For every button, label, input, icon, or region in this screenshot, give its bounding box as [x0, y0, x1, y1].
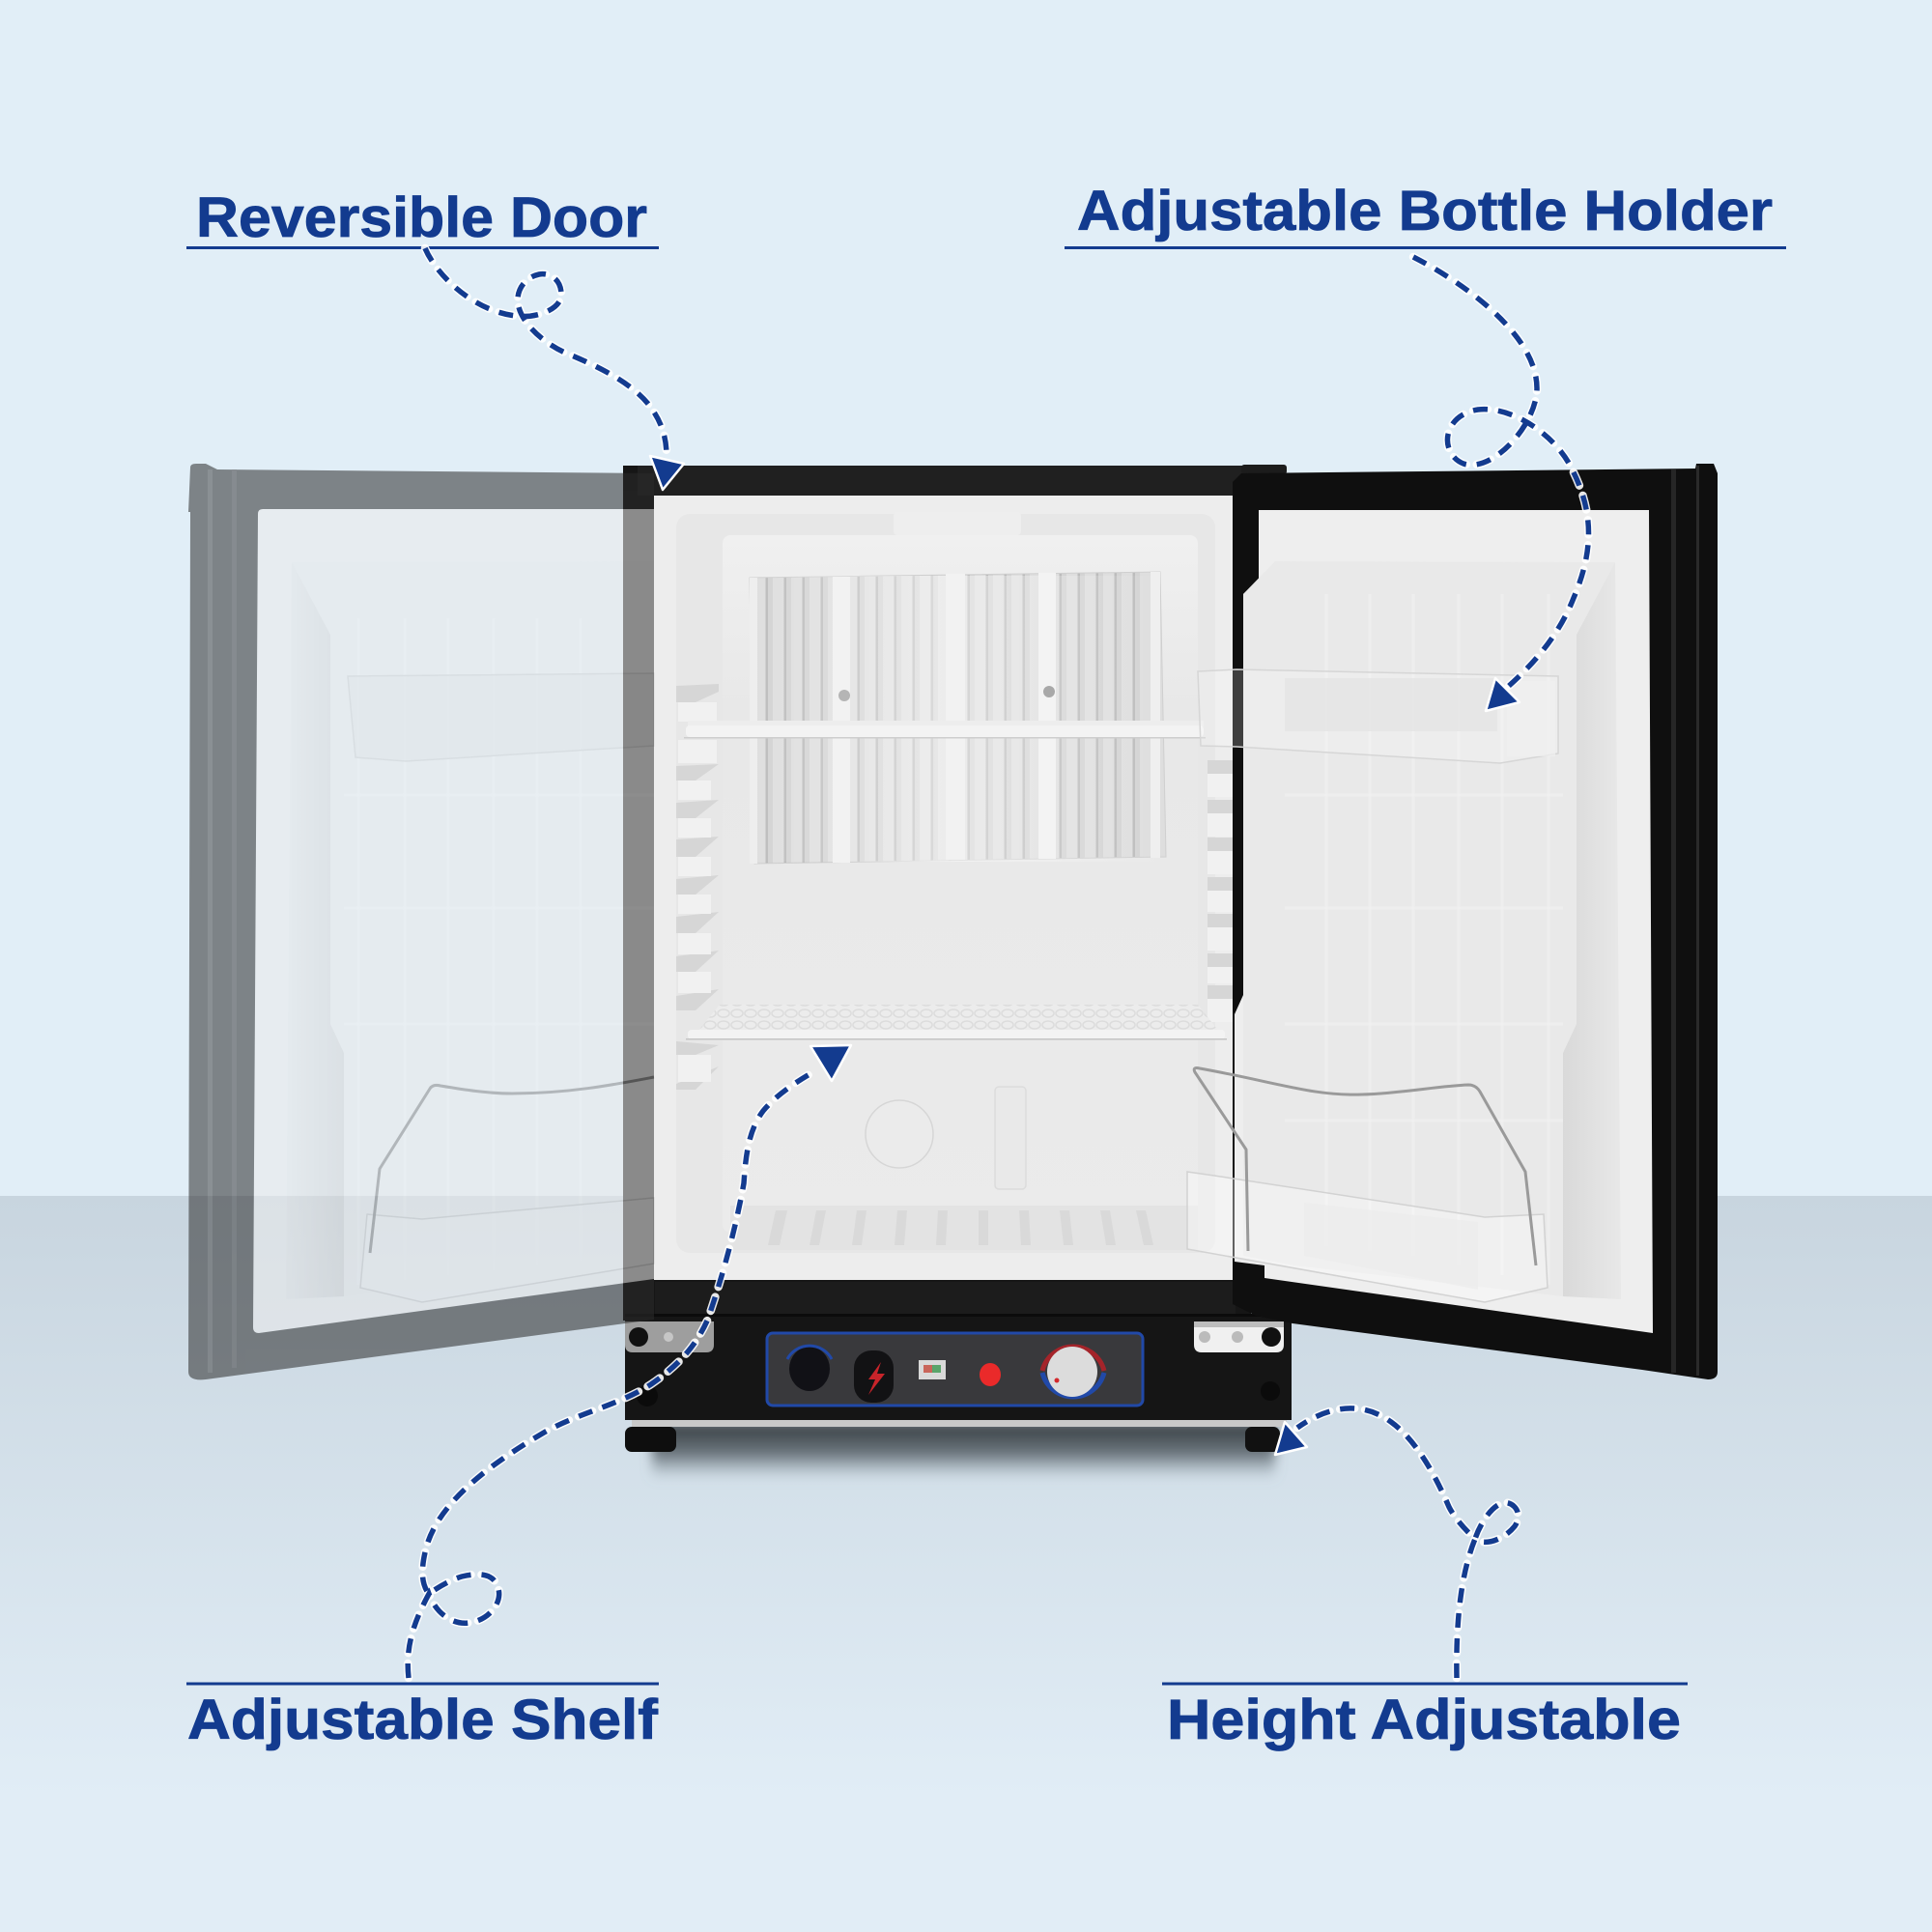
top right hinge cap	[1241, 465, 1287, 474]
hinge right	[1194, 1321, 1284, 1352]
control box base	[625, 1282, 1292, 1452]
upper adjustable shelf	[684, 721, 1206, 738]
lower holder wire rail	[1194, 1068, 1536, 1265]
door liner relief	[1243, 561, 1615, 1296]
floor	[0, 1196, 1932, 1932]
arrow: reversible door	[425, 248, 684, 490]
lower adjustable shelf	[686, 1005, 1227, 1039]
floor shadow	[652, 1422, 1275, 1480]
interior cavity	[676, 514, 1215, 1253]
cabinet white face	[654, 496, 1235, 1280]
control panel	[767, 1333, 1143, 1406]
interior back wall	[723, 535, 1198, 1233]
silver trim strip	[632, 1420, 1287, 1427]
rear drain recess	[995, 1087, 1026, 1189]
ghost door liner relief	[292, 561, 654, 1296]
arrow: adjustable shelf	[408, 1045, 851, 1678]
label: Height Adjustable: Height Adjustable	[1167, 1689, 1681, 1751]
label: Adjustable Shelf: Adjustable Shelf	[187, 1689, 659, 1751]
left ghost door (reversible position)	[188, 464, 654, 1379]
ghost door shaded strip	[286, 562, 344, 1299]
arrow: bottle holder	[1413, 257, 1589, 711]
indicator window	[919, 1360, 946, 1379]
rocker switch	[854, 1350, 894, 1403]
corner screw right	[1261, 1381, 1280, 1401]
upper bottle holder	[1198, 669, 1558, 763]
corner screw left	[637, 1385, 658, 1406]
ghost lower holder	[360, 1077, 654, 1302]
cooling fins	[750, 572, 1166, 864]
shelf rails left	[676, 684, 719, 1090]
fridge cabinet	[623, 465, 1287, 1321]
ghost upper holder	[348, 673, 654, 761]
label: Adjustable Bottle Holder: Adjustable Bottle Holder	[1077, 180, 1773, 242]
temperature knob	[1042, 1347, 1104, 1397]
red button	[980, 1363, 1001, 1386]
interior floor slots	[730, 1206, 1198, 1250]
adjustable foot right	[1245, 1427, 1280, 1452]
push button	[787, 1346, 832, 1391]
right open door	[1187, 464, 1718, 1379]
hinge left	[625, 1321, 714, 1352]
ghost door ribs	[344, 618, 654, 1285]
arrow: height adjustable foot	[1275, 1408, 1519, 1678]
shelf rails left white blocks	[678, 702, 717, 1082]
door liner shaded strip	[1563, 562, 1621, 1299]
adjustable foot left	[625, 1427, 676, 1452]
round drain cap	[866, 1100, 933, 1168]
ceiling lamp cover	[894, 512, 1021, 535]
door liner ribs	[1285, 594, 1563, 1285]
shelf rails right	[1208, 760, 1234, 1022]
lower bottle holder	[1187, 1068, 1548, 1302]
door liner panel	[1235, 510, 1653, 1333]
ghost door liner panel	[253, 509, 654, 1333]
label: Reversible Door: Reversible Door	[196, 186, 647, 249]
